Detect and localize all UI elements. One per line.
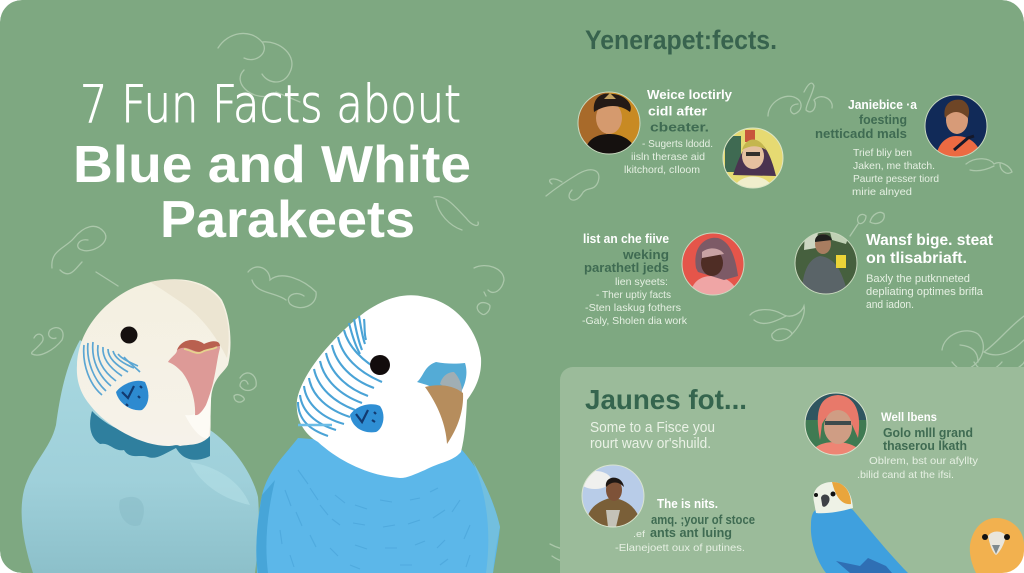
fact 4 text: Baxly the putknneted: [866, 273, 970, 285]
fact 2 text: [815, 97, 939, 198]
right bird cere: [417, 362, 466, 390]
right bird cheek stripes: [298, 316, 385, 436]
fact 2 text: foesting: [859, 112, 907, 127]
fact 1 text: - Sugerts ldodd.: [642, 138, 713, 150]
fact 1 text: lkitchord, cIloom: [624, 164, 700, 176]
fact 5 text: thaserou lkath: [883, 438, 967, 453]
right bird beak: [425, 385, 463, 444]
fact 1 text: cbeater.: [650, 120, 709, 134]
section heading: Yenerapet:fects.: [585, 25, 777, 55]
portrait 5: [795, 232, 857, 294]
fact 6 text: amq. ;your of stoce: [651, 512, 755, 527]
small blue bird: [811, 482, 908, 573]
fact 1 text: [624, 87, 733, 176]
left bird cheek spot: [116, 381, 148, 410]
left bird head: [77, 279, 230, 446]
fact 2 text: Janiebice ·a: [848, 97, 918, 112]
panel intro text: [590, 419, 715, 452]
fact 1 text: iisln therase aid: [631, 151, 705, 163]
portrait 7 ring: [582, 465, 644, 527]
parakeet: blue and white, right: [256, 295, 500, 573]
fact 4 text: [866, 232, 994, 311]
title: 7 Fun Facts about: [80, 75, 461, 135]
fact 3 text: -Sten laskug fothers: [585, 302, 681, 314]
fact 1 text: Weice loctirly: [647, 87, 733, 102]
portrait 7: [579, 465, 644, 527]
fact 6 text: ants ant luing: [650, 525, 732, 540]
portrait 2 ring: [723, 128, 783, 188]
fact 2 text: Jaken, me thatch.: [853, 160, 935, 172]
portrait 4 ring: [682, 233, 744, 295]
left bird collar: [90, 411, 210, 460]
fact 4 text: and iadon.: [866, 299, 914, 311]
fact 2 text: mirie alnyed: [852, 186, 912, 198]
fact 2 text: Paurte pesser tiord: [853, 173, 939, 185]
panel heading: Jaunes fot...: [585, 384, 747, 415]
fact 4 text: Wansf bige. steat: [866, 232, 994, 249]
title: Parakeets: [160, 191, 415, 249]
fact 2 text: Trief bliy ben: [853, 147, 912, 159]
panel intro text: Some to a Fisce you: [590, 419, 715, 436]
portrait 6 ring: [805, 393, 867, 455]
right bird feather texture: [280, 470, 470, 569]
fact 6 text: The is nits.: [657, 496, 718, 511]
fact 3 text: [582, 231, 688, 327]
title: [73, 75, 471, 249]
panel intro text: rourt wavv or'shuild.: [590, 435, 711, 452]
left bird body: [22, 340, 259, 573]
portrait 3 ring: [925, 95, 987, 157]
right bird cheek spot: [350, 404, 383, 432]
fact 3 text: lien syeets:: [615, 276, 668, 288]
portrait 6: [805, 393, 867, 455]
panel: lower right box: [560, 367, 1024, 573]
fact 3 text: - Ther uptiy facts: [596, 289, 671, 301]
fact 4 text: on tlisabriaft.: [866, 250, 967, 267]
fact 3 text: parathetl jeds: [584, 260, 669, 275]
fact 5 text: Golo mlll grand: [883, 425, 973, 440]
fact 3 text: weking: [622, 247, 669, 262]
right bird body: [256, 438, 500, 573]
portrait 1: [578, 92, 640, 154]
fact 1 text: cidl after: [648, 104, 707, 118]
portrait 2: [723, 128, 783, 190]
right bird eye: [370, 355, 390, 375]
title: Blue and White: [73, 136, 471, 194]
fact 6 text: .ef: [633, 529, 646, 539]
left bird eye: [120, 326, 138, 344]
parakeet: pale blue, left: [22, 279, 259, 573]
fact 2 text: netticadd mals: [815, 126, 907, 141]
fact 3 text: list an che fiive: [583, 231, 669, 246]
left bird cheek stripes: [84, 342, 140, 395]
fact 5 text: .bilid cand at the ifsi.: [857, 469, 954, 481]
portrait 3: [925, 95, 987, 157]
right bird head: [297, 295, 481, 478]
fact 4 text: depliating optimes brifla: [866, 286, 984, 298]
portrait 1 ring: [578, 92, 640, 154]
left bird beak: [168, 340, 220, 415]
fact 5 text: Oblrem, bst our afyllty: [869, 455, 979, 467]
small orange bird: [970, 518, 1024, 573]
fact 6 text: [615, 496, 755, 554]
portrait 4: [682, 233, 744, 295]
fact 6 text: -Elanejoett oux of putines.: [615, 542, 745, 554]
fact 3 text: -Galy, Sholen dia work: [582, 315, 688, 327]
fact 5 text: [857, 410, 979, 481]
portrait 5 ring: [795, 232, 857, 294]
fact 5 text: Well lbens: [881, 410, 937, 424]
